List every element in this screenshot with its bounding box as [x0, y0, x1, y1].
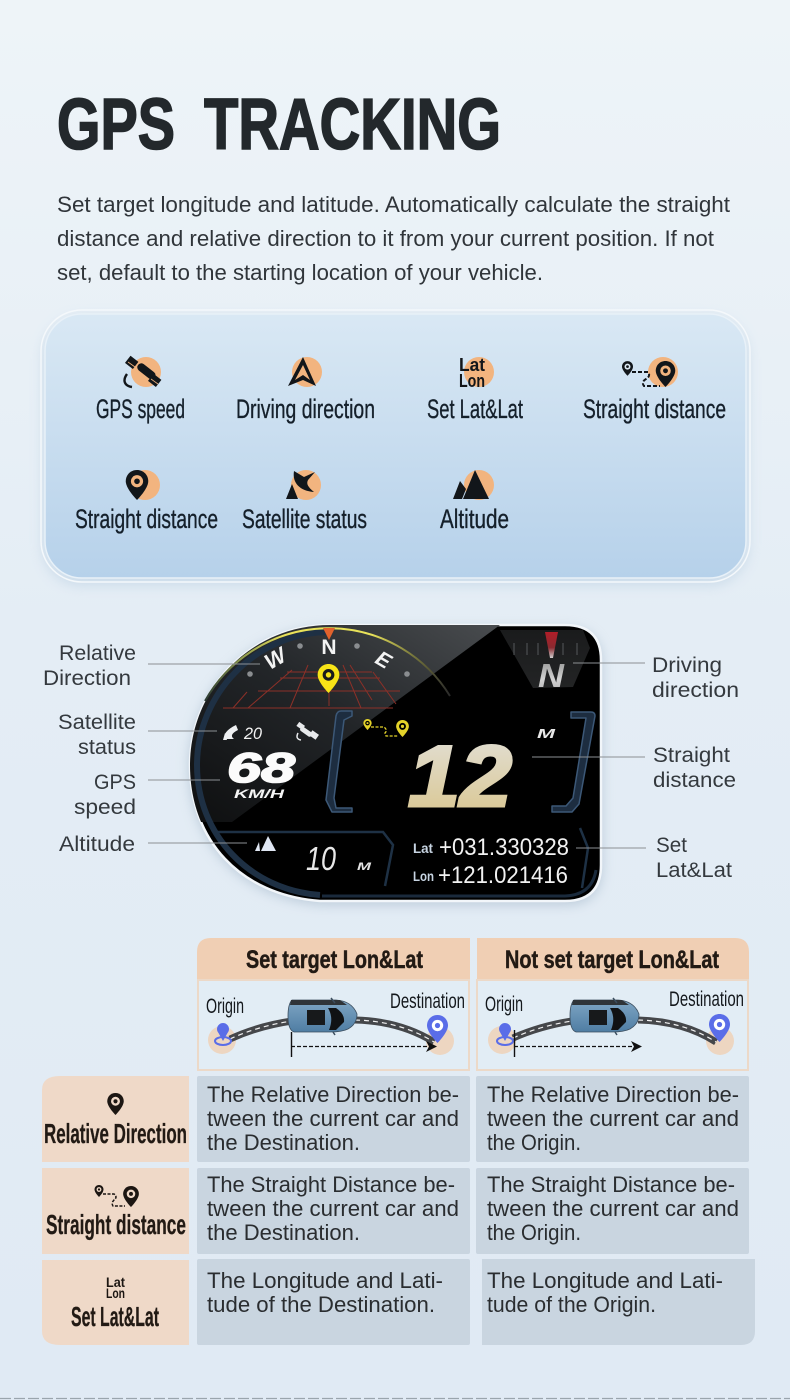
cell: distance, set target: The Straight Distance be-: [207, 1172, 455, 1197]
title: GPS: [57, 85, 175, 165]
yellow target pin: [318, 664, 339, 693]
callout: Straight distance: distance: [653, 768, 736, 792]
column: Not set target Lon&Lat header: Not set target Lon&Lat: [505, 946, 720, 974]
speed reading: KM/H: [234, 787, 285, 801]
intro text block: Set target longitude and latitude. Automatically calculate the straight: [57, 192, 731, 217]
cell: coordinates, not set: The Longitude and Lati-: [487, 1268, 723, 1293]
row label: Relative Direction: Relative Direction: [44, 1118, 187, 1149]
callout: Satellite status: status: [78, 735, 136, 759]
feature: Altitude: Altitude: [440, 504, 509, 534]
cell: distance, set target: tween the current car and: [207, 1196, 459, 1221]
compass arc: [205, 628, 450, 701]
row label: Set Lat&Lat: Set Lat&Lat: [71, 1301, 159, 1332]
feature: Set Lat&Lat: Lat: [459, 355, 485, 375]
cell: direction, set target: the Destination.: [207, 1130, 360, 1155]
feature: Driving direction: [236, 357, 375, 424]
column: Set target Lon&Lat header: Set target Lon&Lat: [246, 946, 424, 974]
cell: distance, set target: the Destination.: [207, 1220, 360, 1245]
altitude reading: 10: [306, 840, 337, 877]
callout: Relative Direction: [43, 641, 260, 690]
lat lon reading: Lat: [413, 840, 433, 856]
lat lon reading: [413, 834, 569, 889]
feature: Straight distance route: [583, 357, 726, 424]
intro text block: distance and relative direction to it from your current position. If not: [57, 226, 715, 251]
destination marker: [709, 1014, 730, 1042]
intro text block: set, default to the starting location of your vehicle.: [57, 260, 543, 285]
speed reading: [227, 744, 296, 801]
feature: GPS speed: GPS speed: [96, 394, 185, 424]
cell: distance, set target: [197, 1168, 470, 1254]
satellite count: 20: [243, 724, 263, 743]
cell: distance, not set: the Origin.: [487, 1220, 581, 1245]
origin marker: [497, 1023, 513, 1045]
route icon: [363, 719, 409, 737]
dashboard device: [185, 620, 602, 905]
callout: Set Lat&Lat: [576, 833, 732, 882]
title: TRACKING: [204, 85, 501, 165]
callout: Set Lat&Lat: Lat&Lat: [656, 858, 732, 882]
lower panels outlines: [217, 828, 588, 888]
cell: direction, set target: tween the current car and: [207, 1106, 459, 1131]
altitude reading: M: [357, 861, 372, 873]
heading compass: [514, 632, 577, 694]
diagram: set target: [198, 980, 469, 1070]
compass arc: N: [321, 636, 337, 659]
cell: distance, not set: The Straight Distance be-: [487, 1172, 735, 1197]
intro text block: [57, 192, 731, 285]
satellite icon: [296, 722, 319, 740]
title: [57, 85, 501, 165]
callout: Relative Direction: Direction: [43, 666, 131, 690]
row label: Straight distance: Straight distance: [46, 1209, 186, 1240]
diagram: set target: Destination: [390, 990, 465, 1013]
column: Not set target Lon&Lat header: [477, 938, 749, 980]
callout: GPS speed: speed: [74, 795, 136, 819]
callout: Straight distance: Straight: [653, 743, 730, 767]
speed reading: 68: [227, 744, 296, 791]
row label: Set Lat&Lat: Lat: [106, 1275, 125, 1290]
callout: Satellite status: [58, 710, 217, 759]
destination marker: [427, 1015, 448, 1043]
center frame: [326, 711, 595, 812]
straight distance arrow: [514, 1030, 642, 1057]
compass arc: W: [260, 641, 292, 674]
column: Set target Lon&Lat header: [197, 938, 470, 980]
lat lon reading: +031.330328: [439, 834, 569, 861]
distance reading: 12: [408, 729, 512, 825]
cell: direction, not set: The Relative Direction be-: [487, 1082, 739, 1107]
straight distance arrow: [291, 1032, 437, 1057]
car: [288, 998, 357, 1035]
altitude reading: [255, 836, 372, 877]
callout: Altitude: Altitude: [59, 832, 135, 856]
row label: Set Lat&Lat: [42, 1260, 189, 1345]
callout: Driving direction: Driving: [652, 653, 722, 677]
panel: feature icons: [41, 310, 750, 586]
cell: coordinates, set target: The Longitude and Lati-: [207, 1268, 443, 1293]
origin marker: [215, 1023, 231, 1045]
cell: coordinates, not set: tude of the Origin.: [487, 1292, 656, 1317]
cell: direction, not set: the Origin.: [487, 1130, 581, 1155]
row label: Set Lat&Lat: Lon: [106, 1286, 125, 1301]
callout: Set Lat&Lat: Set: [656, 833, 687, 857]
diagram: set target: Origin: [206, 995, 244, 1018]
feature: Driving direction: Driving direction: [236, 394, 375, 424]
lat lon reading: Lon: [413, 868, 434, 884]
feature: GPS speed: [96, 356, 185, 424]
row label: Straight distance: [42, 1168, 189, 1254]
cell: coordinates, not set: [482, 1259, 755, 1345]
cell: coordinates, set target: tude of the Destination.: [207, 1292, 435, 1317]
cell: direction, set target: The Relative Direction be-: [207, 1082, 459, 1107]
row label: Relative Direction: [42, 1076, 189, 1162]
callout: Satellite status: Satellite: [58, 710, 136, 734]
cell: coordinates, set target: [197, 1259, 470, 1345]
cell: distance, not set: [476, 1168, 749, 1254]
diagram: not set target: Origin: [485, 993, 523, 1016]
feature: Set Lat&Lat: [427, 355, 523, 424]
feature: Altitude: [440, 470, 509, 534]
feature: Satellite status: [242, 470, 367, 534]
feature: Set Lat&Lat: Set Lat&Lat: [427, 394, 523, 424]
feature: Set Lat&Lat: Lon: [459, 371, 485, 391]
callout: GPS speed: GPS: [94, 770, 136, 794]
red perspective grid: [223, 665, 400, 708]
cell: direction, not set: tween the current car and: [487, 1106, 739, 1131]
heading compass: N: [538, 657, 565, 694]
feature: Satellite status: Satellite status: [242, 504, 367, 534]
compass arc: E: [371, 647, 396, 674]
diagram: not set target: [477, 980, 748, 1070]
cell: direction, set target: [197, 1076, 470, 1162]
callout: Relative Direction: Relative: [59, 641, 136, 665]
cell: direction, not set: [476, 1076, 749, 1162]
diagram: not set target: Destination: [669, 988, 744, 1011]
callout: Driving direction: direction: [652, 678, 739, 702]
feature: Straight distance pin: [75, 470, 218, 534]
callout: Driving direction: [573, 653, 739, 702]
lat lon reading: +121.021416: [438, 862, 568, 889]
callout: Straight distance: [532, 743, 736, 792]
feature: Straight distance route: Straight distance: [583, 394, 726, 424]
callout: GPS speed: [74, 770, 220, 819]
satellite count: [223, 724, 263, 743]
cell: distance, not set: tween the current car and: [487, 1196, 739, 1221]
feature: Straight distance pin: Straight distance: [75, 504, 218, 534]
car: [570, 998, 639, 1035]
distance unit: M: [537, 726, 557, 741]
